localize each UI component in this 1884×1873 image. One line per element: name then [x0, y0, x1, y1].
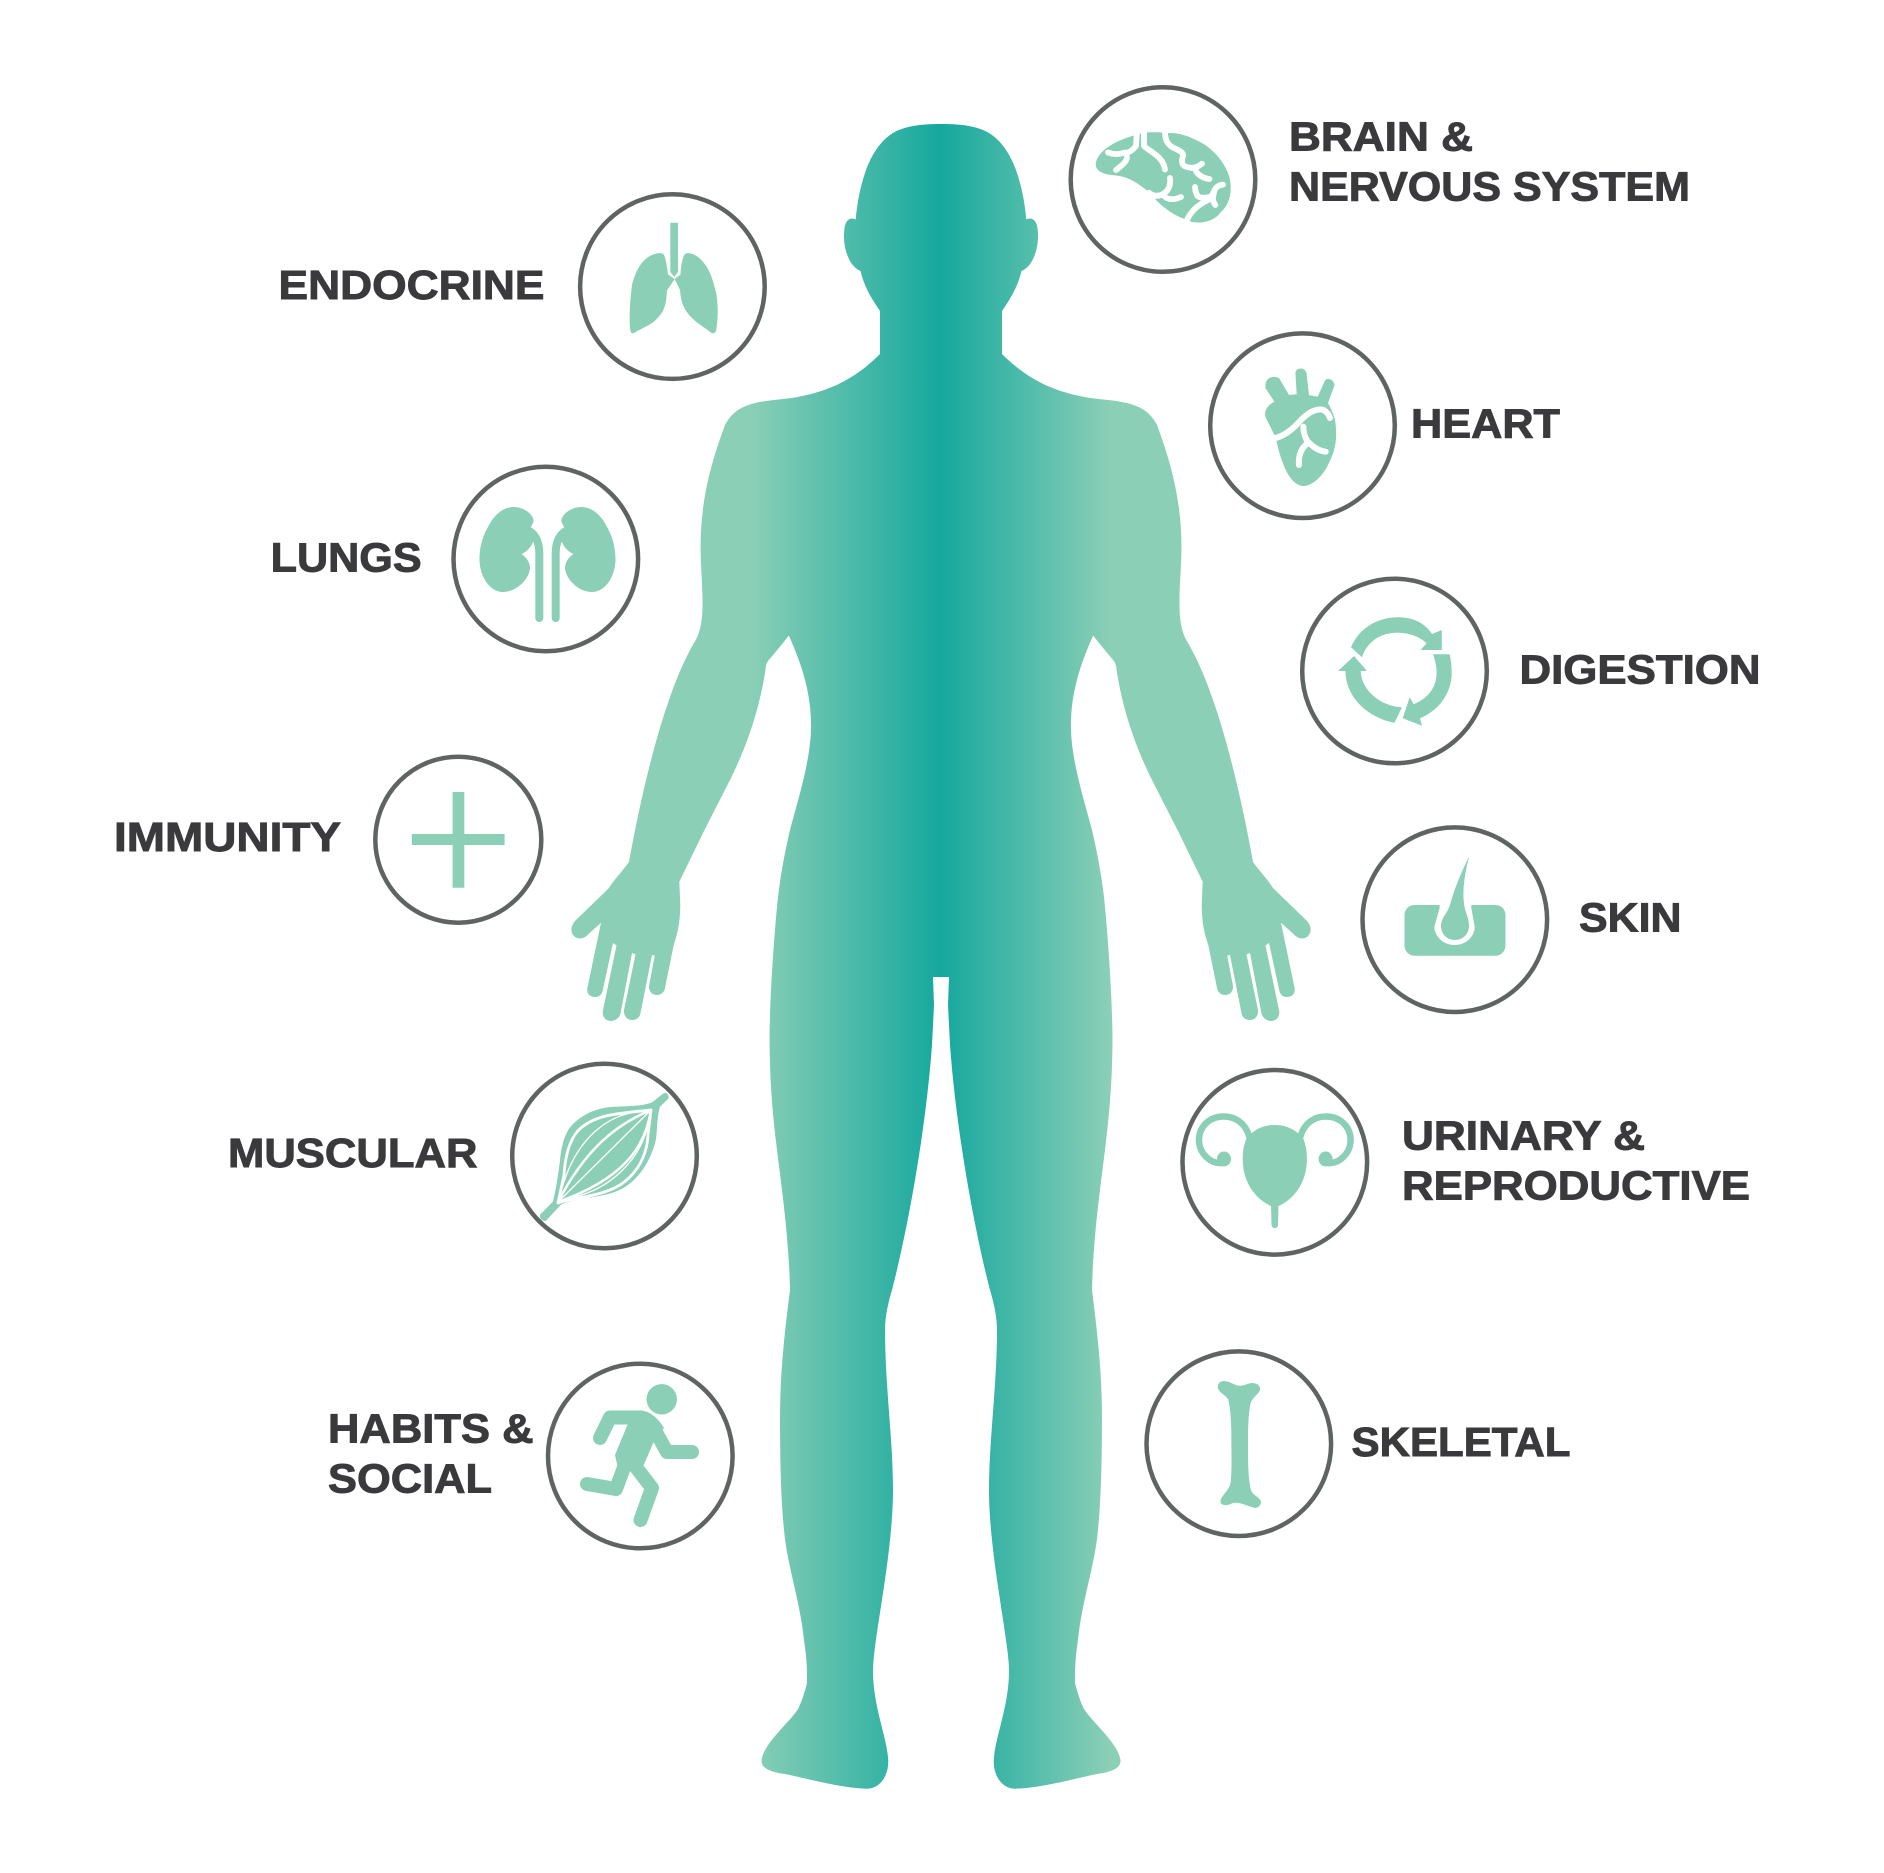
panel: digestion — [1302, 579, 1760, 763]
label: brain and nervous system: NERVOUS SYSTEM — [1289, 164, 1690, 210]
circle: urinary — [1182, 1070, 1367, 1255]
icon: heart — [1265, 368, 1336, 486]
label: digestion: DIGESTION — [1520, 647, 1760, 693]
circle: lungs — [454, 467, 638, 651]
icon: runner — [587, 1384, 692, 1520]
icon: lungs — [630, 223, 718, 333]
icon: brain — [1096, 130, 1231, 223]
panel: urinary and reproductive — [1182, 1070, 1750, 1255]
label: urinary and reproductive: URINARY & — [1402, 1113, 1645, 1159]
label: muscular: MUSCULAR — [228, 1130, 478, 1176]
label: heart: HEART — [1411, 401, 1560, 447]
icon: kidneys — [479, 507, 616, 618]
human body silhouette — [571, 124, 1311, 1789]
label: habits and social: HABITS & — [328, 1406, 534, 1452]
circle: skeletal — [1146, 1351, 1331, 1536]
label: brain and nervous system: BRAIN & — [1289, 114, 1473, 160]
panel: skin — [1362, 827, 1682, 1012]
circle: muscular — [512, 1064, 697, 1248]
circle: digestion — [1302, 579, 1487, 763]
label: skeletal: SKELETAL — [1352, 1419, 1570, 1465]
circle: immunity — [375, 757, 541, 923]
panel: lungs — [271, 467, 638, 651]
label: habits and social — [328, 1406, 534, 1502]
icon: muscle — [540, 1093, 669, 1221]
circle: habits — [548, 1364, 733, 1548]
panel: habits and social — [328, 1364, 733, 1548]
label: brain and nervous system — [1289, 114, 1690, 210]
panel: skeletal — [1146, 1351, 1570, 1536]
icon: skin follicle — [1404, 857, 1506, 956]
circle: skin — [1362, 827, 1547, 1012]
panel: brain and nervous system — [1071, 87, 1690, 272]
icon: cross — [412, 792, 505, 888]
panel: muscular — [228, 1064, 697, 1248]
circle: endocrine — [580, 194, 765, 379]
label: skin: SKIN — [1579, 895, 1682, 941]
label: habits and social: SOCIAL — [328, 1456, 492, 1502]
label: immunity: IMMUNITY — [114, 814, 341, 860]
label: urinary and reproductive — [1402, 1113, 1750, 1209]
icon: digestion arrows — [1338, 617, 1452, 726]
circle: heart — [1210, 333, 1395, 518]
label: endocrine: ENDOCRINE — [278, 262, 544, 308]
label: urinary and reproductive: REPRODUCTIVE — [1402, 1163, 1750, 1209]
icon: uterus — [1199, 1116, 1351, 1228]
icon: bone — [1218, 1381, 1261, 1508]
circle: brain — [1071, 87, 1255, 272]
panel: endocrine — [278, 194, 765, 379]
label: lungs: LUNGS — [271, 535, 422, 581]
panel: immunity — [114, 757, 541, 923]
panel: heart — [1210, 333, 1560, 518]
